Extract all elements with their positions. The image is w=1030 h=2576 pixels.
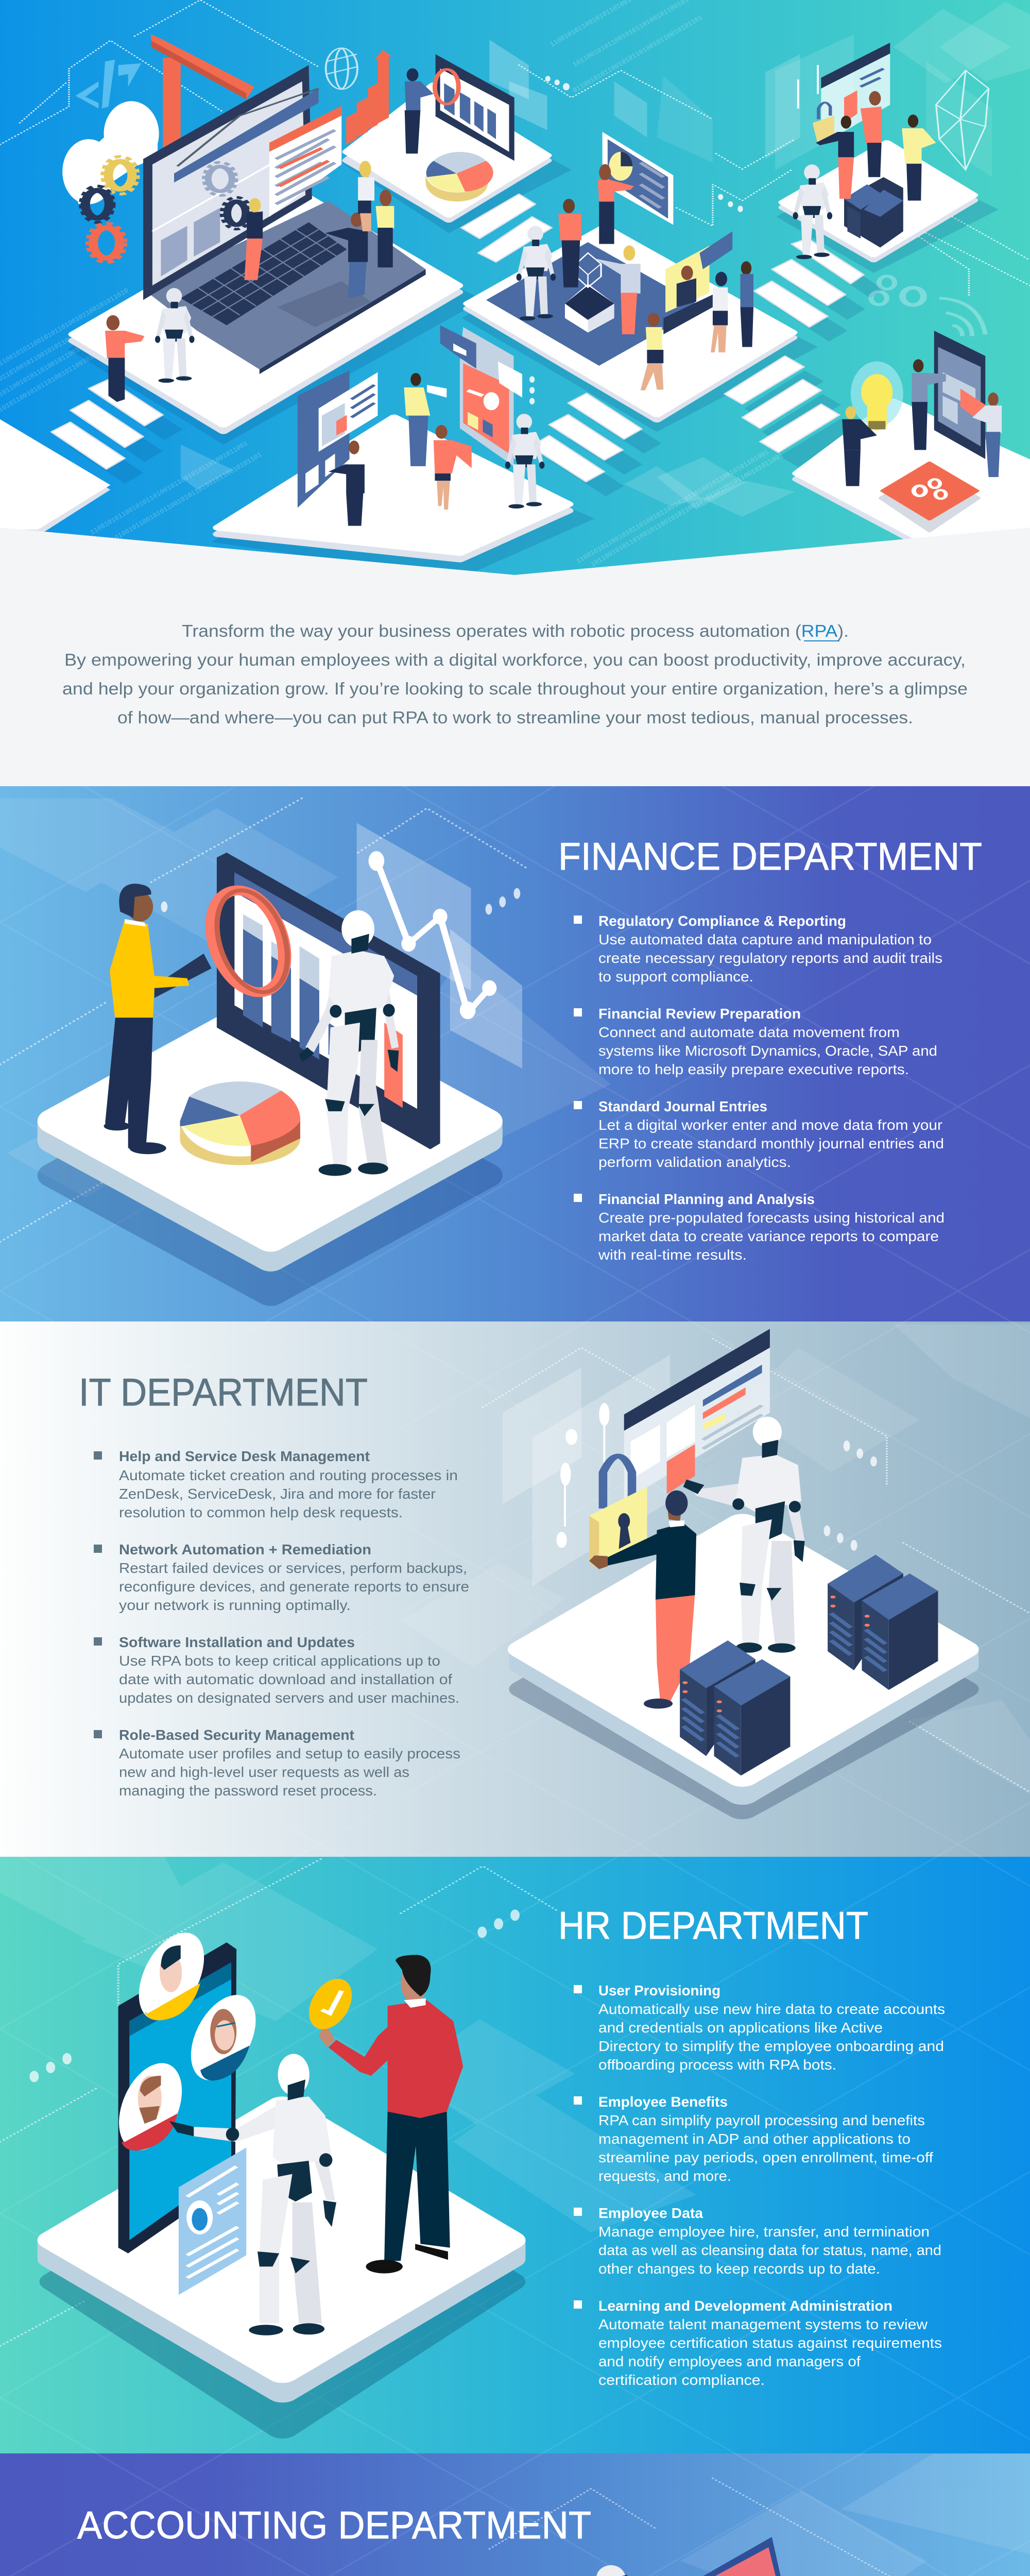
item: planning and analysis — [574, 1191, 945, 1263]
binary code pattern: 011010010110010101100101011010010110010101101 — [103, 451, 263, 548]
icon: globe — [326, 48, 357, 89]
laptop — [143, 65, 426, 374]
video panel — [663, 231, 732, 334]
item: user provisioning — [574, 1982, 945, 2073]
item: regulatory compliance: to support compliance. — [598, 969, 753, 985]
item: employee data: Employee Data — [598, 2205, 703, 2221]
steps — [51, 194, 864, 482]
panel: intro band — [0, 528, 1030, 788]
panel: HR department — [0, 1857, 1030, 2453]
app window — [624, 1329, 770, 1501]
item: network automation: Network Automation + Remediation — [119, 1541, 371, 1557]
icon: screen gear — [204, 162, 236, 196]
item: employee benefits: RPA can simplify payroll processing and benefits — [598, 2112, 925, 2128]
item: learning and development: employee certification status against requirements — [598, 2335, 942, 2351]
item: financial review: systems like Microsoft Dynamics, Oracle, SAP and — [598, 1043, 937, 1059]
finance illustration — [0, 798, 611, 1294]
item: user provisioning: Automatically use new hire data to create accounts — [598, 2001, 945, 2017]
accounting illustration — [407, 2454, 1030, 2576]
finance title: FINANCE DEPARTMENT — [558, 835, 982, 878]
item: help desk: Automate ticket creation and routing processes in — [119, 1467, 458, 1483]
people: bottom right group — [842, 359, 1002, 486]
person — [589, 1490, 696, 1709]
panel: hero illustration — [0, 0, 1030, 582]
dotted circuit lines — [0, 0, 1030, 296]
item: planning and analysis: Create pre-populated forecasts using historical and — [598, 1210, 945, 1226]
item: employee data — [574, 2205, 941, 2277]
phone with bubbles — [440, 325, 522, 466]
item: employee benefits: Employee Benefits — [598, 2094, 728, 2110]
dots — [823, 1440, 877, 1551]
server racks — [828, 1555, 938, 1690]
item: planning and analysis: market data to create variance reports to compare — [598, 1228, 939, 1244]
bar chart icon — [346, 50, 391, 145]
item: software installation: Software Installation and Updates — [119, 1634, 355, 1650]
dots — [161, 888, 520, 914]
robot — [568, 2565, 686, 2576]
item: employee benefits: management in ADP and other applications to — [598, 2131, 911, 2147]
data board — [603, 132, 673, 225]
item: regulatory compliance: Regulatory Compliance & Reporting — [598, 913, 846, 929]
platform shadows — [67, 94, 999, 578]
item: security management: Automate user profiles and setup to easily process — [119, 1745, 460, 1761]
pie chart — [180, 1081, 300, 1165]
HR title: HR DEPARTMENT — [558, 1904, 868, 1947]
binary code pattern: 1100101011001010110100101100101011010 — [0, 286, 130, 367]
chart board — [217, 853, 440, 1149]
item: security management: managing the password reset process. — [119, 1783, 377, 1799]
crane — [151, 35, 254, 148]
cloud — [62, 101, 159, 204]
intro text: Transform the way your business operates with robotic process automation ( RPA). — [182, 621, 849, 640]
platform — [524, 1523, 963, 1810]
item: software installation: updates on designated servers and user machines. — [119, 1690, 459, 1706]
step shadows — [69, 253, 884, 496]
binary code pattern: 0110010101100101011010010110010101101 — [572, 13, 704, 94]
binary code pattern: 1010110010101101001011001010110010101 — [0, 333, 130, 414]
network mesh icon — [936, 71, 989, 170]
intro text: and help your organization grow. If you’re looking to scale throughout your entire organization, here’s a glimpse — [62, 679, 968, 698]
binary code pattern: 1011001010110100101100101011001010110 — [0, 317, 130, 398]
item: security management: Role-Based Security Management — [119, 1727, 354, 1743]
hologram cube — [565, 253, 614, 332]
dots — [29, 1909, 520, 2082]
item: network automation: Restart failed devices or services, perform backups, — [119, 1560, 467, 1576]
people: bottom centre group — [329, 373, 544, 526]
intro text: By empowering your human employees with a digital workforce, you can boost productivity, improve accuracy, — [64, 650, 966, 669]
item: employee data: other changes to keep records up to date. — [598, 2261, 880, 2277]
IT illustration — [401, 1324, 1030, 1810]
item: learning and development: Learning and Development Administration — [598, 2298, 892, 2314]
item: employee benefits: streamline pay periods, open enrollment, time-off — [598, 2149, 933, 2165]
avatar: man — [127, 1929, 216, 2024]
item: network automation: reconfigure devices, and generate reports to ensure — [119, 1579, 469, 1595]
platform: top centre — [347, 85, 547, 220]
robot — [683, 1417, 804, 1653]
person with magnifier — [104, 884, 212, 1154]
icon: code brackets — [76, 60, 141, 108]
item: learning and development: Automate talent management systems to review — [598, 2316, 928, 2332]
floating chart panels — [357, 823, 522, 1069]
binary code pattern: 110010101100101011010010110010101101001011001 — [89, 439, 249, 536]
platform — [54, 1003, 486, 1294]
document — [179, 2147, 246, 2295]
web panel — [269, 106, 341, 217]
translucent decoration — [181, 2, 1030, 517]
binary code pattern: 0110100101100101011001010110100101100 — [0, 302, 130, 383]
item: software installation: date with automatic download and installation of — [119, 1671, 452, 1687]
item: security management: new and high-level user requests as well as — [119, 1764, 409, 1780]
person — [319, 1955, 463, 2274]
padlock — [589, 1456, 647, 1569]
panel: finance department — [0, 786, 1030, 1321]
lightbulb — [851, 362, 903, 431]
pie chart — [426, 152, 493, 201]
HR illustration — [0, 1857, 696, 2429]
platform: bottom centre — [218, 417, 568, 560]
item: employee data: Manage employee hire, transfer, and termination — [598, 2224, 930, 2240]
item: learning and development: certification compliance. — [598, 2372, 765, 2388]
item: user provisioning: offboarding process with RPA bots. — [598, 2057, 836, 2073]
item: financial review: more to help easily prepare executive reports. — [598, 1061, 909, 1077]
item: user provisioning: and credentials on applications like Active — [598, 2020, 883, 2036]
item: employee benefits: requests, and more. — [598, 2168, 731, 2184]
item: user provisioning: User Provisioning — [598, 1982, 720, 1998]
item: journal entries: Let a digital worker enter and move data from your — [598, 1117, 942, 1133]
icon: faint gears and signal — [871, 276, 985, 336]
finance board — [435, 54, 514, 161]
phone screen panel — [934, 331, 985, 459]
item: network automation: your network is running optimally. — [119, 1597, 351, 1613]
item: help desk: resolution to common help desk requests. — [119, 1504, 403, 1520]
people: right group — [793, 91, 936, 259]
people: laptop group — [105, 69, 434, 402]
platform — [54, 2106, 509, 2429]
accounting title: ACCOUNTING DEPARTMENT — [77, 2503, 591, 2547]
item: financial review: Connect and automate data movement from — [598, 1024, 900, 1040]
platform: top right — [783, 143, 973, 260]
item: financial review — [574, 1006, 937, 1077]
magnifying glass — [200, 885, 299, 997]
avatar: bearded man — [109, 2060, 192, 2153]
item: planning and analysis: Financial Planning and Analysis — [598, 1191, 815, 1207]
platform: bottom right — [797, 401, 1030, 559]
translucent panels — [503, 1355, 670, 1586]
platform: laptop — [74, 198, 458, 431]
tablet and webpage — [298, 370, 377, 508]
people: centre group — [517, 164, 753, 391]
item: help desk: Help and Service Desk Management — [119, 1448, 370, 1464]
icon: data dots — [529, 76, 743, 404]
laptop — [624, 2537, 903, 2576]
item: security management — [94, 1727, 460, 1799]
item: employee benefits — [574, 2094, 933, 2184]
platform: centre hologram — [468, 227, 793, 420]
item: journal entries — [574, 1098, 944, 1170]
IT title: IT DEPARTMENT — [79, 1370, 368, 1414]
item: learning and development: and notify employees and managers of — [598, 2353, 861, 2369]
panel: IT department — [0, 1321, 1030, 1857]
item: financial review: Financial Review Preparation — [598, 1006, 801, 1022]
intro text: of how—and where—you can put RPA to work to streamline your most tedious, manual processes. — [117, 708, 913, 727]
item: help desk: ZenDesk, ServiceDesk, Jira and more for faster — [119, 1486, 436, 1502]
phone — [118, 1942, 236, 2253]
platform: far left corner — [0, 419, 110, 535]
robot — [169, 2054, 336, 2335]
security panel — [798, 43, 890, 145]
binary code pattern: 1011001010110100101100101011001010110100101100101011001 — [589, 451, 785, 568]
item: software installation: Use RPA bots to keep critical applications up to — [119, 1653, 440, 1669]
item: regulatory compliance — [574, 913, 942, 985]
server racks front — [680, 1640, 790, 1775]
item: journal entries: Standard Journal Entries — [598, 1098, 767, 1114]
item: regulatory compliance: Use automated data capture and manipulation to — [598, 931, 932, 947]
intro text — [62, 621, 968, 727]
icon: gears — [81, 157, 251, 262]
server racks — [844, 177, 903, 248]
panel: accounting department — [0, 2453, 1030, 2576]
item: journal entries: ERP to create standard monthly journal entries and — [598, 1136, 944, 1151]
item: journal entries: perform validation analytics. — [598, 1154, 791, 1170]
item: user provisioning: Directory to simplify the employee onboarding and — [598, 2038, 944, 2054]
binary code pattern — [0, 0, 785, 568]
item: regulatory compliance: create necessary regulatory reports and audit trails — [598, 950, 942, 966]
item: planning and analysis: with real-time results. — [598, 1247, 747, 1263]
check badge — [302, 1976, 359, 2031]
item: learning and development — [574, 2298, 942, 2388]
robot — [299, 910, 399, 1176]
item: network automation — [94, 1541, 469, 1613]
binary code pattern: 1100101011001010110100101100101011010010110010101101001 — [575, 448, 770, 565]
avatar: woman — [179, 1992, 267, 2083]
item: software installation — [94, 1634, 459, 1706]
item: help desk — [94, 1448, 458, 1520]
gear card — [880, 463, 978, 531]
item: employee data: data as well as cleansing data for status, name, and — [598, 2242, 941, 2258]
